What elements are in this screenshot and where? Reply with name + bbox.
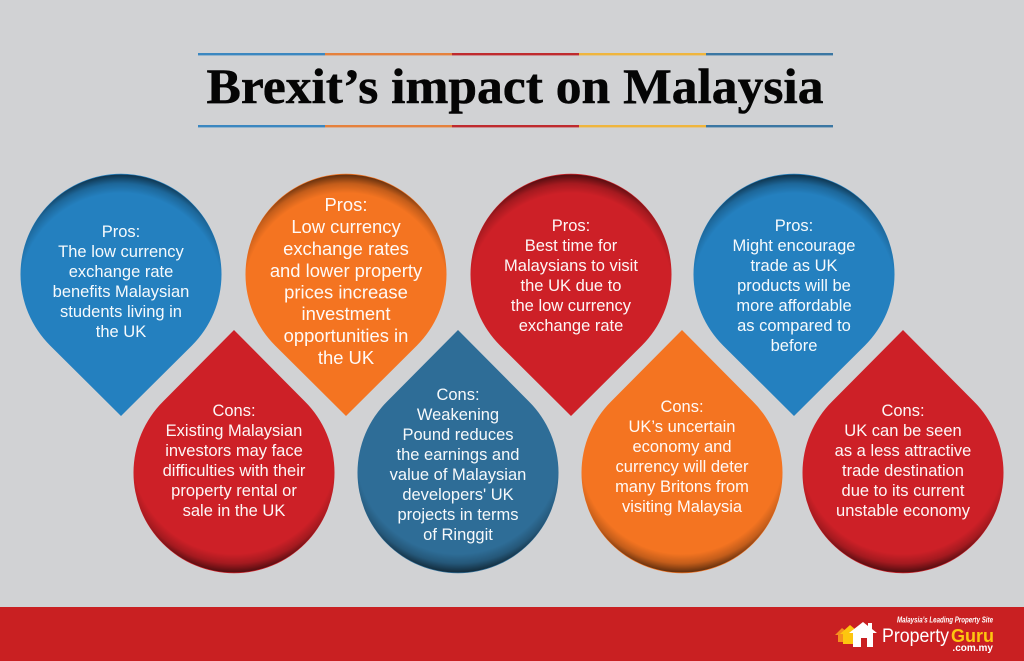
panel: cons, trade destination (red drop): UK can be seen: [844, 422, 962, 440]
panel: pros, visiting the UK (red drop): Pros:: [552, 217, 590, 235]
panel: cons, Britons visiting (orange drop): economy and: [632, 438, 732, 456]
panel: pros, students (blue drop): The low currency: [58, 243, 185, 261]
wordmark: Property: Property: [882, 626, 949, 647]
panel: cons, developers (dark blue drop): Cons:: [436, 386, 480, 404]
panel: cons, developers (dark blue drop): projects in terms: [397, 506, 519, 524]
logo: PropertyGuru: [835, 616, 994, 654]
panel: cons, developers (dark blue drop): Weakening: [417, 406, 499, 424]
tagline: Malaysia’s Leading Property Site: [897, 616, 993, 624]
panel: pros, investment (orange drop): the UK: [318, 347, 375, 368]
panel: cons, Britons visiting (orange drop): [582, 330, 782, 573]
panel: pros, trade (blue drop): Might encourage: [733, 237, 855, 255]
panel: cons, Britons visiting (orange drop): Cons:: [660, 398, 704, 416]
footer band: [0, 607, 1024, 661]
title: Brexit’s impact on Malaysia: [206, 58, 824, 114]
bottom title rule: [198, 125, 833, 127]
panel: pros, visiting the UK (red drop): the UK due to: [521, 277, 621, 295]
panel: cons, trade destination (red drop): trade destination: [842, 462, 964, 480]
panel: pros, investment (orange drop): and lower property: [270, 260, 423, 281]
panel: pros, visiting the UK (red drop): [470, 174, 672, 416]
panel: pros, students (blue drop): [20, 174, 221, 416]
panel: cons, developers (dark blue drop): of Ringgit: [423, 526, 493, 544]
panel: pros, investment (orange drop): prices increase: [284, 282, 408, 302]
panel: cons, developers (dark blue drop): developers' UK: [402, 486, 514, 504]
panel: pros, trade (blue drop): as compared to: [737, 317, 851, 335]
panel: cons, developers (dark blue drop): value of Malaysian: [390, 466, 526, 484]
panel: pros, trade (blue drop): products will be: [737, 277, 851, 295]
panel: cons, investors (red drop): difficulties with their: [163, 462, 306, 480]
panel: pros, students (blue drop): students living in: [60, 303, 182, 321]
panel: cons, Britons visiting (orange drop): currency will deter: [616, 458, 749, 476]
panel: pros, visiting the UK (red drop): Best time for: [525, 237, 618, 255]
panel: pros, investment (orange drop): opportunities in: [284, 325, 408, 346]
panel: pros, trade (blue drop): Pros:: [775, 217, 813, 235]
panel: cons, investors (red drop): property rental or: [171, 482, 297, 500]
panel: pros, trade (blue drop): trade as UK: [750, 257, 838, 275]
icon: white house: [849, 622, 877, 647]
panel: cons, investors (red drop): investors may face: [165, 442, 303, 460]
panel: cons, trade destination (red drop): Cons:: [881, 402, 925, 420]
wordmark: Guru: Guru: [951, 626, 994, 646]
panel: cons, developers (dark blue drop): [358, 330, 558, 573]
panel: pros, visiting the UK (red drop): the low currency: [511, 297, 632, 315]
panel: cons, trade destination (red drop): due to its current: [842, 482, 965, 500]
panel: cons, trade destination (red drop): unstable economy: [836, 502, 971, 520]
panel: pros, students (blue drop): exchange rate: [69, 263, 173, 281]
panel: pros, investment (orange drop): exchange rates: [283, 238, 409, 259]
panel: pros, students (blue drop): the UK: [96, 323, 146, 341]
panel: pros, students (blue drop): benefits Malaysian: [53, 283, 189, 301]
panel: cons, Britons visiting (orange drop): many Britons from: [615, 478, 749, 496]
top title rule: [198, 53, 833, 55]
panel: pros, trade (blue drop): more affordable: [736, 297, 852, 315]
panel: cons, developers (dark blue drop): Pound reduces: [402, 426, 514, 444]
panel: pros, trade (blue drop): [694, 174, 894, 416]
panel: cons, trade destination (red drop): [802, 330, 1004, 573]
wordmark: .com.my: .com.my: [952, 643, 993, 654]
panel: pros, investment (orange drop): Pros:: [325, 194, 367, 215]
panel: cons, investors (red drop): Existing Malaysian: [166, 422, 302, 440]
panel: pros, investment (orange drop): Low currency: [291, 216, 401, 237]
panel: cons, trade destination (red drop): as a less attractive: [835, 442, 971, 460]
panel: cons, Britons visiting (orange drop): visiting Malaysia: [622, 498, 743, 516]
panel: cons, investors (red drop): [133, 330, 334, 573]
panel: pros, visiting the UK (red drop): exchange rate: [519, 317, 623, 335]
panel: pros, students (blue drop): Pros:: [102, 223, 140, 241]
panel: cons, developers (dark blue drop): the earnings and: [397, 446, 519, 464]
panel: cons, investors (red drop): sale in the UK: [183, 502, 285, 520]
panel: pros, investment (orange drop): investment: [302, 303, 390, 324]
panel: cons, Britons visiting (orange drop): UK’s uncertain: [628, 418, 736, 436]
panel: pros, investment (orange drop): [246, 174, 447, 416]
icon: yellow houses: [835, 625, 856, 644]
panel: pros, trade (blue drop): before: [771, 337, 817, 355]
panel: pros, visiting the UK (red drop): Malaysians to visit: [504, 257, 638, 275]
panel: cons, investors (red drop): Cons:: [212, 402, 256, 420]
